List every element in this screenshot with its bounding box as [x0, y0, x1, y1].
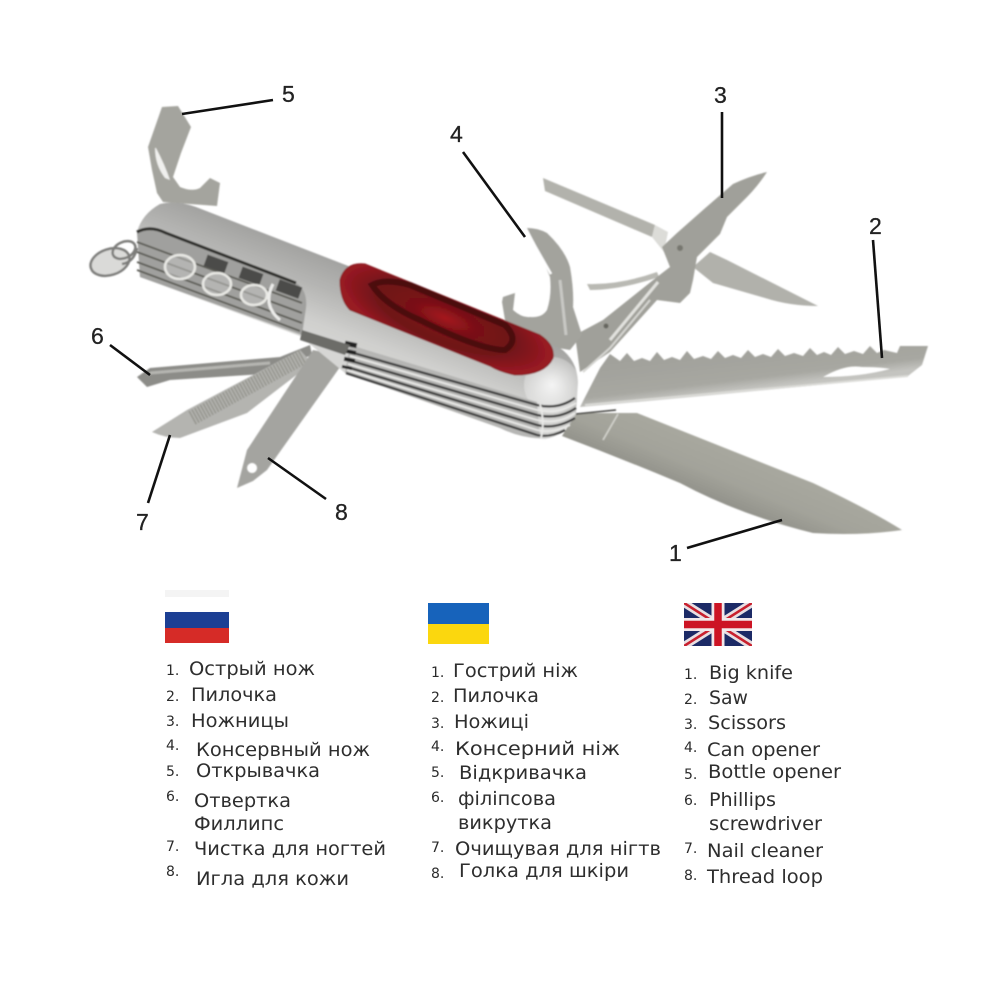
list: Russian: Консервный нож: [196, 739, 370, 761]
list: English: 5.: [684, 767, 697, 783]
list: Ukrainian: 7.: [431, 840, 444, 856]
list: English: Scissors: [708, 712, 786, 734]
leader line and number 2: 2: [869, 213, 882, 239]
body notches: [342, 341, 357, 370]
scissors spring: [587, 272, 659, 290]
list: Ukrainian: 6.: [431, 790, 444, 806]
leader line and number 1: 1: [669, 540, 682, 566]
list: English: Saw: [709, 687, 748, 709]
body ribs: [346, 352, 576, 436]
list: Russian: 6.: [166, 789, 179, 805]
list: English: Nail cleaner: [707, 840, 823, 862]
illustration: multi-tool pocket knife: [87, 106, 928, 534]
list: English: Phillips: [709, 789, 776, 811]
list: Russian: Игла для кожи: [196, 868, 349, 890]
flag: Ukraine: [428, 603, 489, 644]
red wood panel: [340, 264, 553, 375]
leader line and number 7: 7: [136, 509, 149, 535]
list: English: Thread loop: [706, 866, 823, 888]
leader line and number 5: [182, 81, 295, 114]
list: Ukrainian: 8.: [431, 866, 444, 882]
leader line and number 1: [669, 520, 782, 566]
list: Ukrainian: [431, 660, 661, 882]
leader line and number 6: [91, 323, 150, 375]
dark tool slots: [204, 255, 302, 299]
list: English: 1.: [684, 667, 697, 683]
list: Russian: [166, 658, 386, 890]
list: English: 4.: [684, 740, 697, 756]
list: Russian: 5.: [166, 764, 179, 780]
list: Russian: Открывачка: [196, 760, 320, 782]
list: English: 3.: [684, 717, 697, 733]
leader line and number 5: 5: [282, 81, 295, 107]
leader line and number 8: 8: [335, 499, 348, 525]
list: Ukrainian: Очищувая для нігтв: [455, 838, 661, 860]
list: Ukrainian: викрутка: [458, 812, 552, 834]
flag: Russia: [165, 590, 229, 643]
scissors lower blade: [693, 252, 818, 306]
list: English: Big knife: [709, 662, 793, 684]
leader line and number 3: 3: [714, 82, 727, 108]
leader line and number 4: 4: [450, 121, 463, 147]
list: English: screwdriver: [709, 813, 822, 835]
list: Ukrainian: Консерний ніж: [455, 738, 620, 760]
list: Ukrainian: 1.: [431, 665, 444, 681]
list: Ukrainian: 3.: [431, 716, 444, 732]
scissors upper arm: [543, 178, 655, 237]
list: Ukrainian: 2.: [431, 690, 444, 706]
tool: thread loop: [237, 350, 347, 488]
list: Russian: Острый нож: [189, 658, 315, 680]
list: Russian: 1.: [166, 663, 179, 679]
list: Russian: Филлипс: [194, 813, 284, 835]
list: Russian: 2.: [166, 689, 179, 705]
list: Ukrainian: Гострий ніж: [453, 660, 578, 682]
list: English: 6.: [684, 793, 697, 809]
leader line and number 7: [136, 435, 170, 535]
leader line and number 6: 6: [91, 323, 104, 349]
list: Ukrainian: Відкривачка: [459, 762, 587, 784]
knife body: [137, 203, 580, 439]
list: Russian: 8.: [166, 864, 179, 880]
list: Russian: Пилочка: [191, 684, 277, 706]
tool: big knife blade: [562, 410, 902, 534]
leader line and number 2: [869, 213, 882, 358]
flag: United Kingdom: [684, 603, 752, 646]
list: English: Can opener: [707, 739, 820, 761]
leader line and number 3: [714, 82, 727, 198]
list: Ukrainian: 4.: [431, 739, 444, 755]
list: Russian: 4.: [166, 738, 179, 754]
tool: scissors: [543, 172, 818, 372]
list: Ukrainian: 5.: [431, 765, 444, 781]
leader line and number 4: [450, 121, 525, 237]
list: English: Bottle opener: [708, 761, 841, 783]
tool window: [137, 228, 306, 335]
list: Russian: 7.: [166, 839, 179, 855]
tool: saw blade: [580, 346, 928, 407]
tool: phillips screwdriver: [137, 345, 312, 387]
list: English: [684, 662, 841, 888]
tool: nail cleaner file: [152, 350, 312, 438]
scissors pivot arm and upper blade: [575, 172, 767, 372]
list: Russian: Отвертка: [194, 790, 291, 812]
leader line and number 8: [268, 458, 348, 525]
list: English: 2.: [684, 692, 697, 708]
list: English: 8.: [684, 868, 697, 884]
tool window coils: [165, 255, 267, 305]
list: Ukrainian: Ножиці: [454, 711, 529, 733]
tool: can opener: [502, 228, 582, 350]
keyring: [87, 238, 138, 281]
list: Russian: 3.: [166, 714, 179, 730]
list: Russian: Ножницы: [191, 710, 289, 732]
tool: bottle opener: [148, 106, 220, 206]
list: English: 7.: [684, 841, 697, 857]
list: Russian: Чистка для ногтей: [194, 838, 386, 860]
list: Ukrainian: філіпсова: [458, 788, 556, 810]
list: Ukrainian: Пилочка: [453, 685, 539, 707]
list: Ukrainian: Голка для шкіри: [459, 860, 629, 882]
